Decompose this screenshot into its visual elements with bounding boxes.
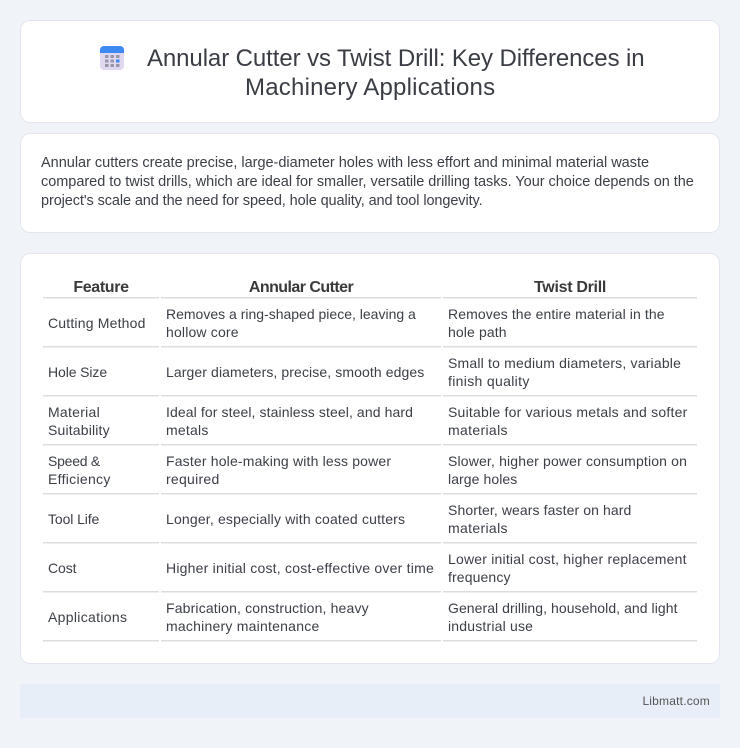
- row: Material Suitability: Suitability: [48, 422, 110, 438]
- comparison table panel: Shorter, wears faster on hard: [448, 502, 631, 518]
- comparison table panel: Lower initial cost, higher replacement: [448, 551, 687, 567]
- comparison table panel: Longer, especially with coated cutters: [166, 511, 405, 527]
- comparison table panel: hole path: [448, 324, 507, 340]
- row: Material Suitability: Material: [48, 404, 100, 420]
- comparison table panel: Suitable for various metals and softer: [448, 404, 687, 420]
- comparison table panel: hollow core: [166, 324, 239, 340]
- footer bar: [20, 684, 720, 718]
- comparison table panel: Ideal for steel, stainless steel, and hard: [166, 404, 413, 420]
- comparison table panel: machinery maintenance: [166, 618, 319, 634]
- title: Machinery Applications: [245, 74, 495, 101]
- intro text: [41, 155, 694, 209]
- row: Speed & Efficiency: [48, 453, 111, 487]
- intro text: project's scale and the need for speed, hole quality, and tool longevity.: [41, 193, 482, 209]
- comparison table panel: Faster hole-making with less power: [166, 453, 391, 469]
- comparison table panel: Fabrication, construction, heavy: [166, 600, 369, 616]
- comparison table panel: large holes: [448, 471, 517, 487]
- title: Annular Cutter vs Twist Drill: Key Differences in: [147, 45, 645, 72]
- comparison table panel: frequency: [448, 569, 511, 585]
- comparison table panel: materials: [448, 520, 508, 536]
- table header: Feature: Feature: [73, 279, 129, 296]
- row: Speed & Efficiency: Speed &: [48, 453, 100, 469]
- comparison table panel: Removes a ring-shaped piece, leaving a: [166, 306, 416, 322]
- comparison table panel: Small to medium diameters, variable: [448, 355, 681, 371]
- footer credit: Libmatt.com: [642, 694, 710, 708]
- row: Applications: Applications: [48, 609, 127, 625]
- comparison table panel: [20, 253, 720, 664]
- comparison table panel: required: [166, 471, 220, 487]
- comparison table panel: Removes the entire material in the: [448, 306, 665, 322]
- comparison table panel: Larger diameters, precise, smooth edges: [166, 364, 424, 380]
- icon: calendar grid: [100, 46, 124, 70]
- intro text: Annular cutters create precise, large-diameter holes with less effort and minimal material waste: [41, 155, 649, 171]
- row: Tool Life: Tool Life: [48, 511, 99, 527]
- row: Cost: Cost: [48, 560, 76, 576]
- intro panel: [20, 133, 720, 233]
- comparison table panel: General drilling, household, and light: [448, 600, 678, 616]
- table header: Annular Cutter: Annular Cutter: [249, 279, 353, 296]
- comparison table panel: metals: [166, 422, 209, 438]
- row: Speed & Efficiency: Efficiency: [48, 471, 111, 487]
- row: Cutting Method: Cutting Method: [48, 315, 146, 331]
- row: Material Suitability: [48, 404, 110, 438]
- title: [147, 45, 645, 101]
- row: Hole Size: Hole Size: [48, 364, 107, 380]
- comparison table panel: finish quality: [448, 373, 530, 389]
- intro text: compared to twist drills, which are ideal for smaller, versatile drilling tasks. Your choice depends on the: [41, 174, 694, 190]
- comparison table panel: Higher initial cost, cost-effective over time: [166, 560, 434, 576]
- comparison table panel: industrial use: [448, 618, 533, 634]
- table header: Twist Drill: Twist Drill: [534, 279, 606, 296]
- comparison table panel: materials: [448, 422, 508, 438]
- header panel: [20, 20, 720, 123]
- comparison table panel: Slower, higher power consumption on: [448, 453, 687, 469]
